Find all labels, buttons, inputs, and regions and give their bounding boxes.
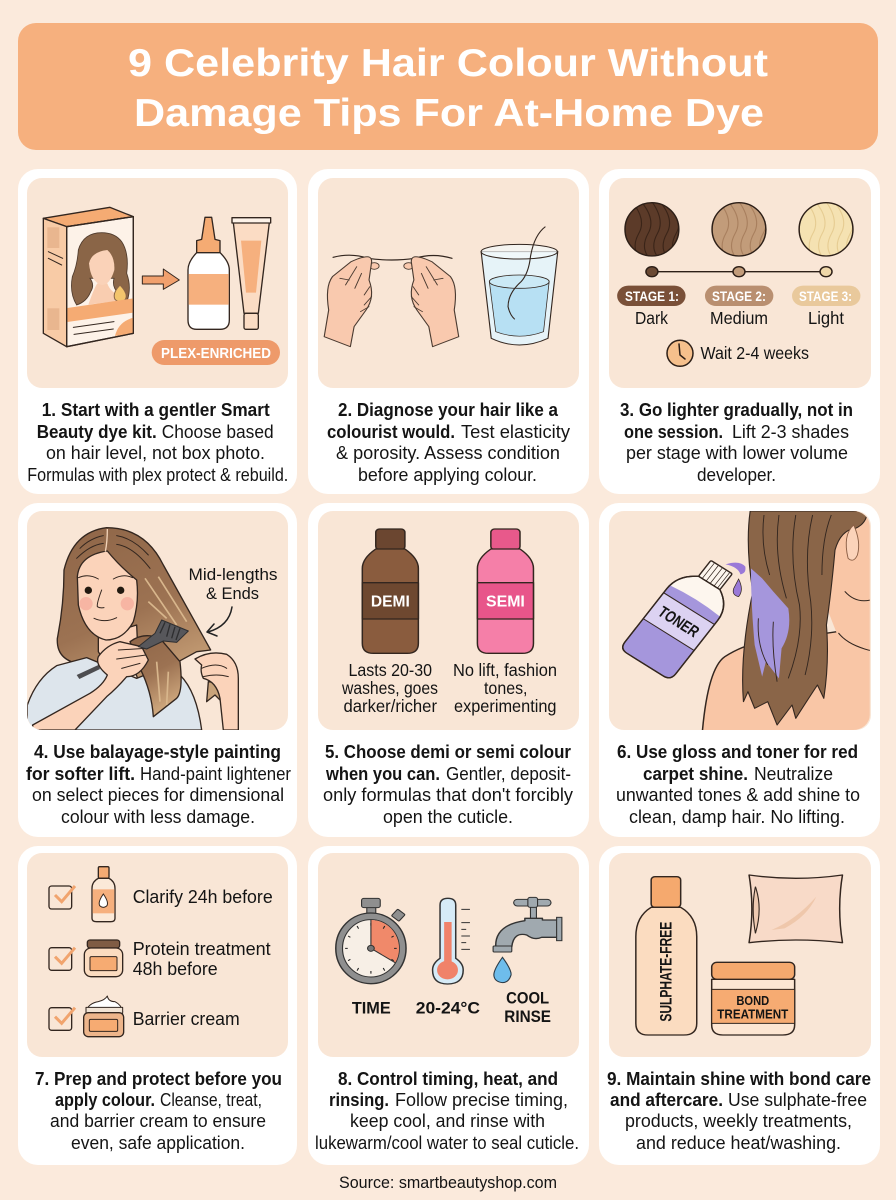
captions: demi and semi <box>341 660 557 716</box>
illustration: hair and shoulder with toner: TONER <box>654 603 703 641</box>
text: tip 5: when you can. <box>325 764 440 784</box>
badge: plex-enriched <box>152 340 280 365</box>
icon: thermometer <box>416 898 480 1017</box>
icon: sulphate-free bottle: SULPHATE-FREE <box>658 922 676 1022</box>
illustration: woman painting hair <box>27 528 238 730</box>
text: tip 2 <box>327 400 570 485</box>
callout: mid-lengths and ends: Mid-lengths <box>188 565 278 584</box>
text: tip 1: Choose based <box>162 422 274 442</box>
label: clarify: Clarify 24h before <box>133 887 273 907</box>
text: tip 9: Use sulphate-free <box>728 1090 867 1110</box>
panel: tip 9 bond care and aftercare <box>599 846 880 1165</box>
text: tip 8: 8. Control timing, heat, and <box>338 1069 558 1089</box>
text: tip 9: and reduce heat/washing. <box>636 1133 841 1153</box>
text: tip 9: and aftercare. <box>610 1090 723 1110</box>
icon: tap with water drop: COOL <box>506 988 549 1007</box>
text: tip 6: carpet shine. <box>643 764 748 784</box>
text: tip 3: 3. Go lighter gradually, not in <box>620 400 853 420</box>
text: tip 2: before applying colour. <box>358 465 537 485</box>
text: tip 3: per stage with lower volume <box>626 443 848 463</box>
illustration: glass of water with hair <box>481 227 558 345</box>
illustration: hair swatches timeline <box>617 202 860 306</box>
text: tip 5: open the cuticle. <box>383 807 513 827</box>
icon: bond treatment jar: BOND <box>736 994 769 1009</box>
captions: demi and semi: tones, <box>484 678 528 698</box>
illustration: demi bottle <box>362 529 418 653</box>
text: tip 1: on hair level, not box photo. <box>46 443 265 463</box>
text: tip 9 <box>607 1069 871 1153</box>
text: tip 2: Test elasticity <box>461 422 570 442</box>
captions: demi and semi: experimenting <box>454 696 556 716</box>
illustration: hair and shoulder with toner <box>620 511 872 732</box>
text: tip 7: and barrier cream to ensure <box>50 1111 266 1131</box>
illustration: dye box, bottle and tube <box>43 207 271 347</box>
text: tip 2: 2. Diagnose your hair like a <box>338 400 559 420</box>
text: tip 8 <box>315 1069 579 1153</box>
panel: tip 2 diagnose <box>308 169 589 494</box>
stage labels: STAGE 3: <box>799 289 852 304</box>
illustration: semi bottle: SEMI <box>486 593 525 610</box>
text: tip 8: rinsing. <box>329 1090 389 1110</box>
text: tip 6: unwanted tones & add shine to <box>616 785 860 805</box>
label: protein treatment: Protein treatment <box>133 939 271 959</box>
captions: demi and semi: No lift, fashion <box>453 660 557 680</box>
callout: mid-lengths and ends <box>188 565 278 636</box>
text: tip 4: on select pieces for dimensional <box>32 785 284 805</box>
text: tip 7: even, safe application. <box>71 1133 245 1153</box>
panel: tip 8 timing heat rinsing <box>308 846 589 1165</box>
text: tip 9: 9. Maintain shine with bond care <box>607 1069 871 1089</box>
header banner with title: 9 Celebrity Hair Colour Without <box>128 42 768 85</box>
stage labels <box>625 289 852 328</box>
text: tip 6: clean, damp hair. No lifting. <box>629 807 845 827</box>
checklist: protein treatment <box>49 940 123 977</box>
text: tip 1: 1. Start with a gentler Smart <box>42 400 270 420</box>
stage labels: STAGE 2: <box>712 289 766 304</box>
header banner with title <box>18 23 878 150</box>
panel: tip 1 dye kit <box>18 169 297 494</box>
badge: plex-enriched: PLEX-ENRICHED <box>161 345 271 362</box>
text: tip 8: keep cool, and rinse with <box>350 1111 545 1131</box>
label: protein treatment <box>133 939 271 979</box>
panel: tip 4 balayage <box>18 503 297 837</box>
text: tip 6 <box>616 742 860 827</box>
text: tip 2: & porosity. Assess condition <box>336 443 560 463</box>
text: tip 7: Cleanse, treat, <box>160 1090 262 1110</box>
text: tip 7: 7. Prep and protect before you <box>35 1069 282 1089</box>
icon: tap with water drop: RINSE <box>504 1007 551 1026</box>
icon: tap with water drop <box>493 897 562 1026</box>
stage labels: Dark <box>635 308 668 328</box>
panel: tip 6 gloss and toner <box>599 503 880 837</box>
text: tip 1: Formulas with plex protect & rebuild. <box>27 465 288 485</box>
captions: demi and semi: Lasts 20-30 <box>348 660 432 680</box>
text: tip 5: 5. Choose demi or semi colour <box>325 742 571 762</box>
text: tip 9: products, weekly treatments, <box>625 1111 852 1131</box>
label: barrier cream: Barrier cream <box>133 1009 240 1029</box>
icon: bond treatment jar: TREATMENT <box>717 1007 789 1022</box>
icon: stopwatch <box>336 898 406 1017</box>
checklist: clarify <box>49 867 115 922</box>
illustration: demi bottle: DEMI <box>371 593 410 610</box>
text: tip 3: developer. <box>697 465 776 485</box>
icon: clock with wait time: Wait 2-4 weeks <box>700 343 809 363</box>
icon: silk pillow <box>749 875 842 943</box>
panel: tip 5 demi or semi <box>308 503 589 837</box>
text: tip 8: Follow precise timing, <box>395 1090 568 1110</box>
text: tip 5 <box>323 742 573 827</box>
text: tip 7 <box>35 1069 282 1153</box>
text: tip 4 <box>26 742 291 827</box>
stage labels: STAGE 1: <box>625 289 679 304</box>
text: tip 7: apply colour. <box>55 1090 155 1110</box>
text: tip 4: colour with less damage. <box>61 807 255 827</box>
text: tip 1 <box>27 400 288 485</box>
icon: stopwatch: TIME <box>352 998 391 1017</box>
icon: bond treatment jar <box>712 962 795 1035</box>
icon: thermometer: 20-24°C <box>416 998 480 1017</box>
icon: clock with wait time <box>667 340 809 366</box>
stage labels: Light <box>808 308 844 328</box>
captions: demi and semi: darker/richer <box>344 696 437 716</box>
text: tip 5: Gentler, deposit- <box>446 764 571 784</box>
text: tip 4: Hand-paint lightener <box>140 764 291 784</box>
panel: tip 3 go lighter <box>599 169 880 494</box>
text: tip 4: 4. Use balayage-style painting <box>34 742 281 762</box>
text: tip 6: 6. Use gloss and toner for red <box>617 742 858 762</box>
text: tip 3: one session. <box>624 422 723 442</box>
text: tip 6: Neutralize <box>754 764 833 784</box>
text: tip 1: Beauty dye kit. <box>37 422 157 442</box>
callout: mid-lengths and ends: & Ends <box>206 584 259 603</box>
text: tip 3 <box>620 400 853 485</box>
text: tip 2: colourist would. <box>327 422 455 442</box>
icon: sulphate-free bottle <box>636 877 697 1035</box>
text: tip 5: only formulas that don't forcibly <box>323 785 573 805</box>
text: tip 8: lukewarm/cool water to seal cuticle. <box>315 1133 579 1153</box>
checklist: barrier cream <box>49 996 124 1037</box>
captions: demi and semi: washes, goes <box>341 678 438 698</box>
label: protein treatment: 48h before <box>133 959 218 979</box>
panel: tip 7 prep and protect <box>18 846 297 1165</box>
illustration: hands stretching a hair strand <box>324 255 459 347</box>
header banner with title: Damage Tips For At-Home Dye <box>134 92 764 135</box>
text: tip 3: Lift 2-3 shades <box>732 422 849 442</box>
text: tip 4: for softer lift. <box>26 764 135 784</box>
source line: Source: smartbeautyshop.com <box>339 1174 557 1192</box>
stage labels: Medium <box>710 308 768 328</box>
illustration: semi bottle <box>477 529 533 653</box>
